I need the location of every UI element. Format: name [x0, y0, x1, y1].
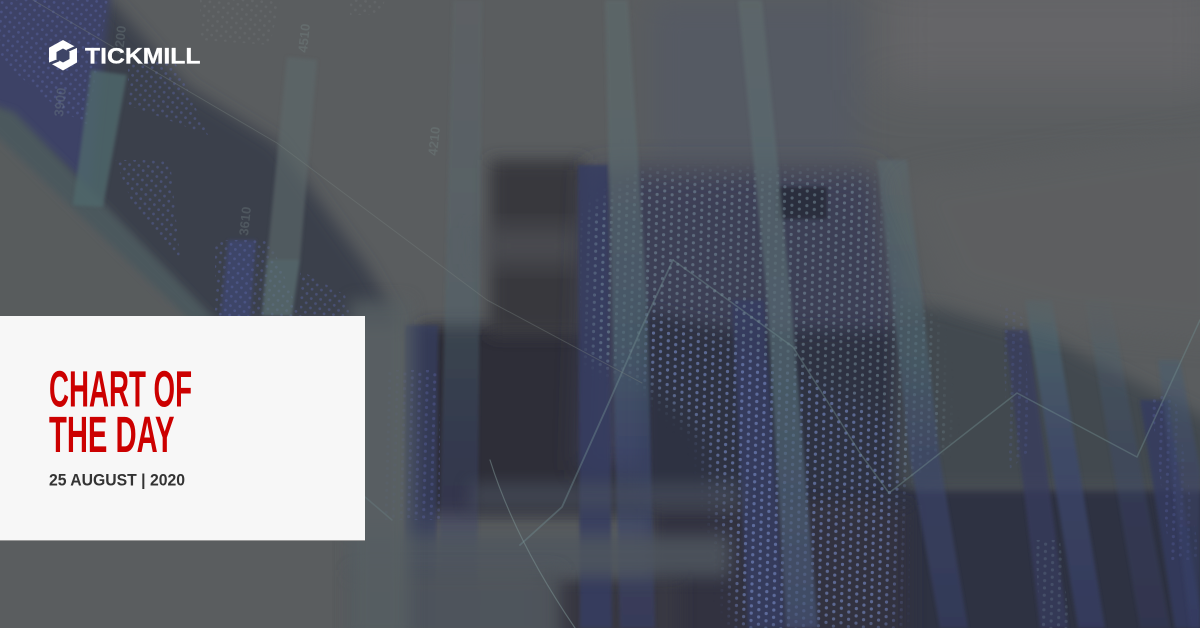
date: 25 AUGUST | 2020 — [49, 472, 185, 490]
heading: chart of the day: THE DAY — [49, 406, 174, 463]
faint chart axis labels — [51, 23, 443, 236]
icon: hexagon logo mark — [49, 40, 77, 70]
faint chart axis labels: 4200 — [111, 25, 129, 55]
faint chart axis labels: 4210 — [425, 126, 443, 156]
left light bezel below screen — [0, 125, 195, 325]
dark lower area — [420, 325, 910, 515]
right panel — [897, 305, 1200, 490]
panel: title card — [0, 316, 365, 540]
blue columns — [404, 165, 1200, 628]
faint chart axis labels: 3610 — [236, 206, 254, 236]
faint bluish top centre — [650, 0, 860, 165]
small dots top left — [0, 0, 385, 316]
faint chart axis labels: 4510 — [295, 23, 313, 53]
heading: chart of the day: CHART OF — [49, 361, 192, 418]
heading: chart of the day — [49, 361, 192, 463]
hazy foreground fog — [470, 482, 740, 510]
faint chart axis labels: 3900 — [51, 87, 69, 117]
dark screen left — [0, 0, 400, 325]
dotted world map — [385, 140, 1200, 628]
wordmark: TICKMILL — [85, 43, 201, 68]
logo: Tickmill — [49, 40, 201, 70]
